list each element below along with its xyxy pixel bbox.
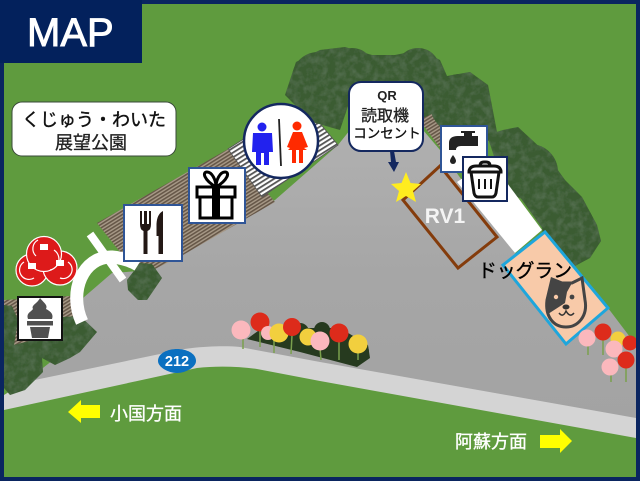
RV1 parking space: RV1	[425, 205, 466, 228]
hedge: right	[487, 127, 601, 266]
label: Oguni direction: 小国方面	[110, 404, 182, 424]
route shield 212	[158, 349, 196, 373]
restroom hatched area	[228, 102, 338, 197]
dog run label: ドッグラン	[478, 260, 572, 282]
brown hatched walkway	[97, 148, 275, 270]
title: MAP	[0, 0, 142, 63]
flowers: right bed	[578, 324, 638, 382]
icon: soft serve	[18, 297, 62, 340]
icon: dog	[547, 278, 586, 327]
brown hatched walkway left	[4, 296, 87, 354]
title: MAP: MAP	[27, 11, 114, 55]
park name box: 展望公園	[55, 133, 127, 153]
icon: faucet	[441, 126, 487, 172]
parking lot asphalt	[4, 130, 636, 420]
icon: restroom	[244, 104, 318, 178]
park name box: くじゅう・わいた	[22, 110, 166, 130]
callout: QR reader and outlet: コンセント	[353, 126, 421, 141]
park name box	[12, 102, 176, 156]
callout: QR reader and outlet: QR	[377, 88, 397, 103]
white strip	[457, 160, 542, 253]
icon: gift	[189, 168, 245, 223]
flowers: middle bed	[232, 312, 370, 367]
icon: star	[391, 172, 421, 202]
arrow: left	[68, 400, 100, 423]
icon: red camellia	[16, 236, 77, 286]
route shield 212: 212	[165, 354, 189, 370]
hedge: top	[285, 47, 497, 141]
hedge: lower left	[4, 305, 97, 395]
icon: fork and knife	[124, 205, 182, 261]
road 212 band	[4, 346, 636, 438]
callout: QR reader and outlet	[349, 82, 423, 151]
white driveway arc	[77, 234, 138, 322]
hedges	[4, 47, 601, 395]
label: Aso direction: 阿蘇方面	[455, 432, 527, 452]
hedge: near fork	[127, 263, 162, 300]
arrow: right	[540, 429, 572, 453]
callout: QR reader and outlet: 読取機	[361, 107, 409, 125]
brown hatched patch near faucet	[423, 106, 450, 148]
icon: trash can	[463, 157, 507, 201]
RV1 parking space	[403, 166, 497, 268]
arrow: callout to star	[388, 151, 399, 172]
dog run	[478, 232, 608, 344]
